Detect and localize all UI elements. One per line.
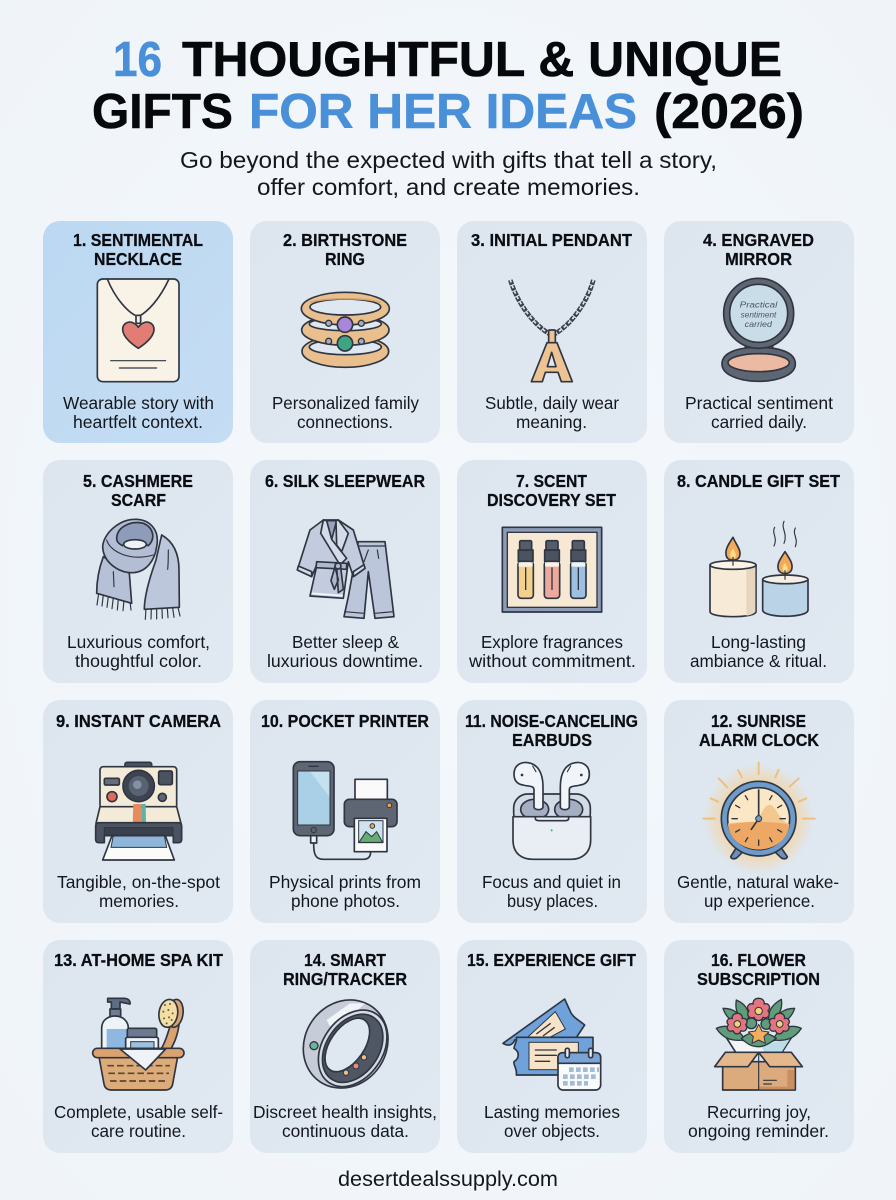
description: card 3 <box>485 393 619 432</box>
footer: website: desertdealssupply.com <box>338 1168 558 1191</box>
description: card 6: luxurious downtime. <box>267 651 423 671</box>
description: card 11 <box>482 872 621 911</box>
panel: 11. Noise-Canceling Earbuds <box>457 700 647 923</box>
heading: card 15: 15. EXPERIENCE GIFT <box>467 950 636 970</box>
panel: 13. At-Home Spa Kit <box>43 940 233 1153</box>
description: card 9: Tangible, on-the-spot <box>57 872 220 892</box>
description: card 6: Better sleep & <box>292 632 399 652</box>
panel: 10. Pocket Printer <box>250 700 440 923</box>
heading: card 11: 11. NOISE-CANCELING <box>465 711 638 731</box>
heading: card 8: 8. CANDLE GIFT SET <box>677 471 840 491</box>
heading: card 9: 9. INSTANT CAMERA <box>56 711 221 731</box>
heading: card 11: EARBUDS <box>512 730 592 750</box>
description: card 2: connections. <box>297 412 393 432</box>
heading: card 5 <box>83 471 193 510</box>
description: card 5 <box>67 632 210 671</box>
heading: card 16: SUBSCRIPTION <box>697 969 820 989</box>
panel: 9. Instant Camera <box>43 700 233 923</box>
description: card 13 <box>54 1102 223 1141</box>
heading: card 4: 4. ENGRAVED <box>703 230 814 250</box>
heading: card 2: 2. BIRTHSTONE <box>283 230 407 250</box>
panel: 16. Flower Subscription <box>664 940 854 1153</box>
panel: 5. Cashmere Scarf <box>43 460 233 683</box>
description: card 11: Focus and quiet in <box>482 872 621 892</box>
panel: 15. Experience Gift <box>457 940 647 1153</box>
description: card 10 <box>269 872 421 911</box>
description: card 7 <box>468 632 636 671</box>
title <box>92 33 804 139</box>
panel: 7. Scent Discovery Set <box>457 460 647 683</box>
panel: 1. Sentimental Necklace <box>43 221 233 443</box>
description: card 1: Wearable story with <box>63 393 214 413</box>
heading: card 14: RING/TRACKER <box>283 969 407 989</box>
description: card 6 <box>267 632 423 671</box>
heading: card 5: SCARF <box>111 490 166 510</box>
description: card 2 <box>272 393 419 432</box>
heading: card 12: 12. SUNRISE <box>711 711 806 731</box>
description: card 7: Explore fragrances <box>481 632 623 652</box>
heading: card 16 <box>697 950 820 989</box>
icon: two candles <box>710 521 808 617</box>
description: card 13: Complete, usable self- <box>54 1102 223 1122</box>
heading: card 14 <box>283 950 407 989</box>
heading: card 7: 7. SCENT <box>516 471 587 491</box>
description: card 16: Recurring joy, <box>707 1102 811 1122</box>
heading: card 14: 14. SMART <box>304 950 386 970</box>
icon: stacked rings <box>301 292 389 367</box>
heading: card 2 <box>283 230 407 269</box>
description: card 8: Long-lasting <box>711 632 806 652</box>
heading: card 7 <box>487 471 616 510</box>
icon: necklace card <box>97 279 179 382</box>
description: card 3: meaning. <box>516 412 587 432</box>
description: card 4: carried daily. <box>711 412 807 432</box>
icon: letter A pendant <box>510 280 593 382</box>
description: card 10: Physical prints from <box>269 872 421 892</box>
icon: sunrise alarm clock <box>703 763 815 874</box>
description: card 5: Luxurious comfort, <box>67 632 210 652</box>
heading: card 11 <box>465 711 638 750</box>
description: card 5: thoughtful color. <box>75 651 202 671</box>
subtitle: Go beyond the expected with gifts that tell a story, <box>180 147 717 173</box>
heading: card 1: 1. SENTIMENTAL <box>73 230 203 250</box>
description: card 1 <box>63 393 214 432</box>
panel: 3. Initial Pendant <box>457 221 647 443</box>
heading: card 12 <box>699 711 819 750</box>
description: card 16 <box>688 1102 829 1141</box>
icon: compact mirror: sentiment <box>741 309 777 319</box>
description: card 7: without commitment. <box>468 651 636 671</box>
description: card 8 <box>690 632 827 671</box>
description: card 12: Gentle, natural wake- <box>677 872 839 892</box>
panel: 4. Engraved Mirror <box>664 221 854 443</box>
heading: card 16: 16. FLOWER <box>711 950 806 970</box>
icon: spa basket <box>93 998 185 1090</box>
icon: tickets and calendar <box>503 999 601 1090</box>
panel: 14. Smart Ring/Tracker <box>250 940 440 1153</box>
description: card 10: phone photos. <box>291 891 400 911</box>
icon: compact mirror: carried <box>745 319 773 329</box>
description: card 11: busy places. <box>507 891 598 911</box>
heading: card 6: 6. SILK SLEEPWEAR <box>265 471 425 491</box>
description: card 14 <box>253 1102 437 1141</box>
heading: card 12: ALARM CLOCK <box>699 730 819 750</box>
panel: 8. Candle Gift Set <box>664 460 854 683</box>
icon: compact mirror <box>722 278 795 381</box>
title: FOR HER IDEAS <box>249 85 637 139</box>
description: card 14: Discreet health insights, <box>253 1102 437 1122</box>
panel: 6. Silk Sleepwear <box>250 460 440 683</box>
description: card 4: Practical sentiment <box>685 393 833 413</box>
heading: card 10: 10. POCKET PRINTER <box>261 711 429 731</box>
description: card 16: ongoing reminder. <box>688 1121 829 1141</box>
panel: 2. Birthstone Ring <box>250 221 440 443</box>
heading: card 5: 5. CASHMERE <box>83 471 193 491</box>
icon: earbuds and case <box>513 762 591 859</box>
icon: robe and pants <box>297 520 394 618</box>
heading: card 4: MIRROR <box>725 249 792 269</box>
icon: flowers in box <box>715 998 802 1090</box>
description: card 9 <box>57 872 220 911</box>
heading: card 7: DISCOVERY SET <box>487 490 616 510</box>
description: card 15 <box>484 1102 620 1141</box>
heading: card 1 <box>73 230 203 269</box>
icon: instant camera <box>96 762 182 860</box>
subtitle: offer comfort, and create memories. <box>257 174 640 200</box>
description: card 15: Lasting memories <box>484 1102 620 1122</box>
heading: card 2: RING <box>325 249 365 269</box>
icon: smart ring <box>286 983 405 1105</box>
description: card 1: heartfelt context. <box>73 412 203 432</box>
heading: card 13: 13. AT-HOME SPA KIT <box>54 950 223 970</box>
description: card 2: Personalized family <box>272 393 419 413</box>
description: card 4 <box>685 393 833 432</box>
subtitle <box>180 147 717 200</box>
description: card 12 <box>677 872 839 911</box>
heading: card 3: 3. INITIAL PENDANT <box>471 230 632 250</box>
description: card 3: Subtle, daily wear <box>485 393 619 413</box>
title: (2026) <box>654 85 804 139</box>
icon: scarf <box>97 519 180 619</box>
heading: card 1: NECKLACE <box>94 249 182 269</box>
title: GIFTS <box>92 85 233 139</box>
description: card 8: ambiance & ritual. <box>690 651 827 671</box>
icon: compact mirror: Practical <box>740 300 779 310</box>
icon: phone and printer <box>293 762 397 859</box>
description: card 14: continuous data. <box>282 1121 409 1141</box>
description: card 12: up experience. <box>704 891 815 911</box>
description: card 15: over objects. <box>504 1121 600 1141</box>
panel: 12. Sunrise Alarm Clock <box>664 700 854 923</box>
title: 16 <box>113 33 162 87</box>
title: THOUGHTFUL & UNIQUE <box>182 33 782 87</box>
description: card 9: memories. <box>99 891 179 911</box>
heading: card 4 <box>703 230 814 269</box>
description: card 13: care routine. <box>91 1121 186 1141</box>
icon: perfume set <box>502 527 602 612</box>
